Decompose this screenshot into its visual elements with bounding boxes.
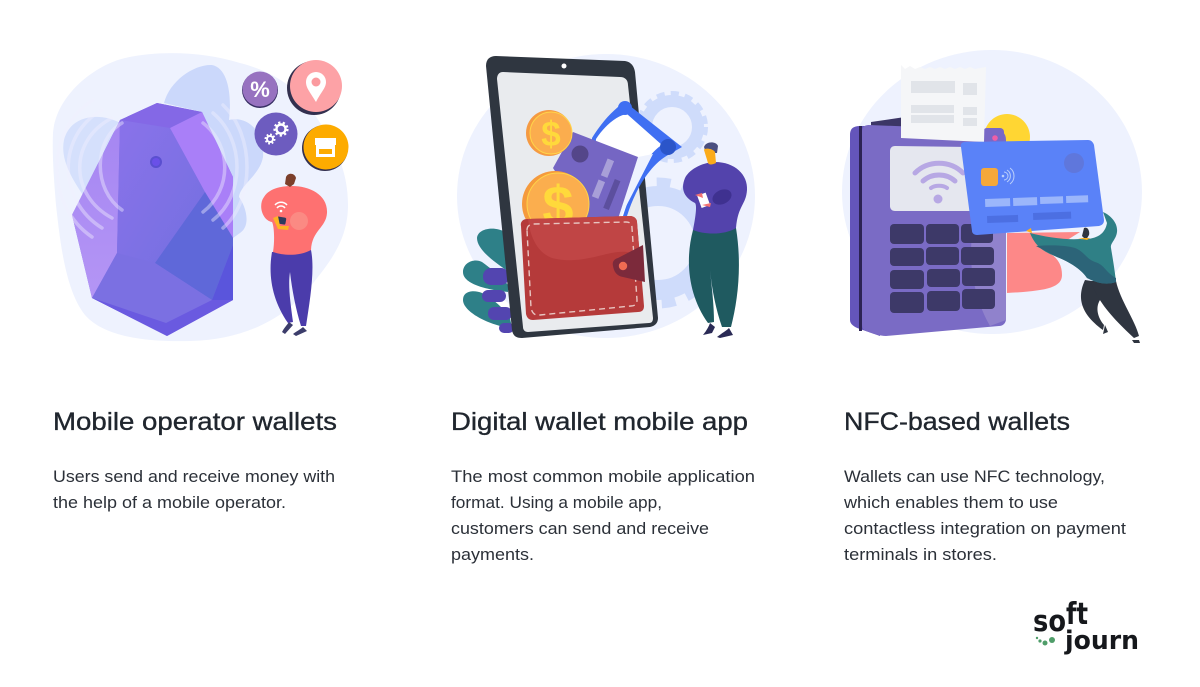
receipt <box>901 65 986 142</box>
illustration: nfc-based wallets <box>842 50 1142 343</box>
background circle <box>842 50 1142 334</box>
gem <box>72 103 233 336</box>
wallet <box>521 216 645 320</box>
coin small <box>526 110 572 156</box>
description: contactless integration on payment <box>844 519 1126 538</box>
badge: gears <box>254 112 298 156</box>
light blue blobs behind gem <box>63 65 263 238</box>
description: terminals in stores. <box>844 545 997 564</box>
badge: location pin <box>287 60 342 115</box>
coin large: $ <box>542 174 574 237</box>
heading: Digital wallet mobile app <box>451 408 748 436</box>
credit card <box>553 132 638 222</box>
man holding card <box>1026 212 1140 343</box>
description: the help of a mobile operator. <box>53 493 286 512</box>
badge: percent <box>242 72 278 108</box>
coin small: $ <box>541 115 561 154</box>
description: Wallets can use NFC technology, <box>844 467 1105 486</box>
badge: store <box>302 124 348 171</box>
credit card <box>961 140 1104 235</box>
description: format. Using a mobile app, <box>451 493 662 512</box>
description <box>53 467 335 512</box>
logo: softjourn: ft <box>1066 597 1088 632</box>
description: customers can send and receive <box>451 519 709 538</box>
background blob <box>53 53 348 341</box>
description <box>451 467 755 564</box>
illustration: digital wallet mobile app <box>457 54 755 338</box>
heading: Mobile operator wallets <box>53 408 337 436</box>
wifi symbol <box>915 163 963 188</box>
column 1 text <box>53 408 337 512</box>
logo: softjourn: so <box>1033 604 1066 638</box>
description: payments. <box>451 545 534 564</box>
terminal <box>850 117 1006 336</box>
description: Users send and receive money with <box>53 467 335 486</box>
heading: NFC-based wallets <box>844 408 1070 436</box>
gears <box>597 94 719 304</box>
yellow circle <box>984 114 1030 160</box>
keypad <box>890 224 995 313</box>
description <box>843 467 1126 564</box>
column 3 text <box>843 408 1126 564</box>
badge: percent: % <box>250 77 270 102</box>
coin large <box>522 171 589 237</box>
banknote <box>590 101 682 216</box>
leaves <box>463 229 514 333</box>
red blob <box>1007 232 1080 293</box>
background circle <box>457 54 755 338</box>
description: The most common mobile application <box>451 467 755 486</box>
column 2 text <box>451 408 755 564</box>
logo: softjourn <box>1033 597 1139 656</box>
logo: softjourn: journ <box>1064 626 1139 656</box>
description: which enables them to use <box>843 493 1058 512</box>
illustration: mobile operator wallets <box>53 53 349 341</box>
man with phone <box>683 142 747 338</box>
phone <box>486 56 658 338</box>
man with phone <box>261 174 327 336</box>
signal waves <box>57 100 247 237</box>
